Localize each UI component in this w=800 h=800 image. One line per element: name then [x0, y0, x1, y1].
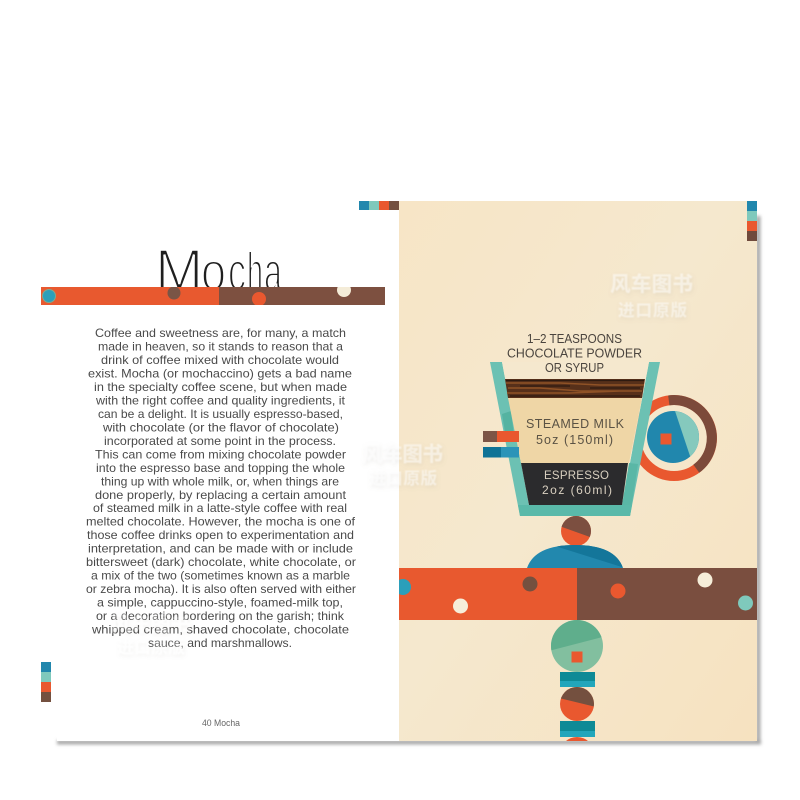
- watermark lower left: 进口原版: [117, 638, 186, 657]
- body text: in the specialty coffee scene, but when made: [94, 380, 347, 394]
- body text: with chocolate (or the flavor of chocolate): [102, 420, 339, 434]
- body text: interpretation, and can be made with or include: [88, 542, 353, 556]
- body text: of steamed milk in a latte-style coffee with real: [93, 501, 347, 515]
- title: c: [228, 242, 246, 302]
- espresso layer: [521, 463, 628, 505]
- top tab swatches: [359, 201, 399, 210]
- watermark centre: 风车图书: [362, 442, 443, 466]
- label: chocolate: [507, 331, 642, 375]
- watermark lower left: [110, 612, 191, 657]
- body text: into the espresso base and topping the whole: [96, 461, 345, 475]
- disc inside handle: [647, 411, 699, 463]
- label: chocolate: 1–2 TEASPOONS: [527, 331, 622, 346]
- right page: illustrated recipe panel: [395, 201, 757, 771]
- body text: a mix of the two (sometimes known as a marble: [91, 569, 350, 583]
- body text: Coffee and sweetness are, for many, a match: [95, 326, 346, 340]
- body text: incorporated at some point in the process.: [104, 434, 336, 448]
- body text: melted chocolate. However, the mocha is one of: [86, 515, 356, 529]
- body text: those coffee drinks open to experimentation and: [87, 528, 354, 542]
- body text: drink of coffee mixed with chocolate would: [101, 353, 339, 367]
- title: o: [201, 242, 226, 302]
- steamed milk layer: [508, 398, 642, 463]
- body text: This can come from mixing chocolate powder: [95, 447, 346, 461]
- blue dome: [527, 545, 623, 568]
- body text: exist. Mocha (or mochaccino) gets a bad name: [88, 366, 352, 380]
- green circle: [551, 620, 603, 672]
- watermark top right: 进口原版: [618, 301, 688, 320]
- body text: made in heaven, so it stands to reason that a: [98, 340, 343, 354]
- orange circle cut by page edge: [566, 737, 588, 741]
- label: steamed milk: [526, 417, 625, 447]
- body text: thing up with whole milk, or, when things are: [101, 474, 339, 488]
- label: espresso: [542, 470, 612, 497]
- watermark lower left: 风车图书: [110, 612, 191, 636]
- label: chocolate: OR SYRUP: [545, 360, 604, 375]
- small bars beside cup: [483, 431, 519, 458]
- chocolate layer: [505, 379, 645, 398]
- label: espresso: ESPRESSO: [544, 470, 609, 482]
- body text: bittersweet (dark) chocolate, white chocolate, or: [86, 555, 356, 569]
- body text: a simple, cappuccino-style, foamed-milk top,: [97, 596, 343, 610]
- label: espresso: 2oz (60ml): [542, 483, 612, 497]
- watermark centre: [362, 442, 443, 488]
- circle below cup: [561, 516, 591, 546]
- body text: can be a delight. It is usually espresso-based,: [98, 407, 343, 421]
- page drop shadow: [57, 216, 761, 744]
- brown and orange circle: [560, 687, 594, 721]
- title: a: [264, 242, 283, 302]
- left page: [57, 201, 399, 741]
- watermark centre: 进口原版: [369, 469, 438, 488]
- title colour band with dots: [41, 287, 385, 305]
- left edge swatches: [41, 662, 51, 702]
- handle ring of cup: [636, 400, 712, 476]
- label: steamed milk: 5oz (150ml): [536, 433, 613, 447]
- body text: with the right coffee and quality ingredients, it: [95, 393, 346, 407]
- watermark top right: [610, 272, 693, 320]
- wide colour band with dots: [395, 568, 757, 620]
- watermark top right: 风车图书: [610, 272, 693, 296]
- body text: done properly, by replacing a certain amount: [95, 488, 347, 502]
- title: h: [247, 242, 263, 302]
- teal block two: [560, 721, 595, 737]
- body text: sauce, and marshmallows.: [148, 636, 292, 650]
- teal block one: [560, 672, 595, 687]
- label: steamed milk: STEAMED MILK: [526, 417, 625, 431]
- body text: or zebra mocha). It is also often served with either: [86, 582, 356, 596]
- right edge swatches: [747, 201, 757, 241]
- body text: [86, 326, 356, 650]
- body text: or a decoration bordering on the garish; think: [96, 609, 345, 623]
- body text: whipped cream, shaved chocolate, chocolate: [91, 623, 349, 637]
- label: chocolate: CHOCOLATE POWDER: [507, 346, 642, 360]
- page number: 40 Mocha: [202, 718, 241, 729]
- coffee cup outline: [490, 362, 660, 516]
- title: M: [155, 238, 203, 303]
